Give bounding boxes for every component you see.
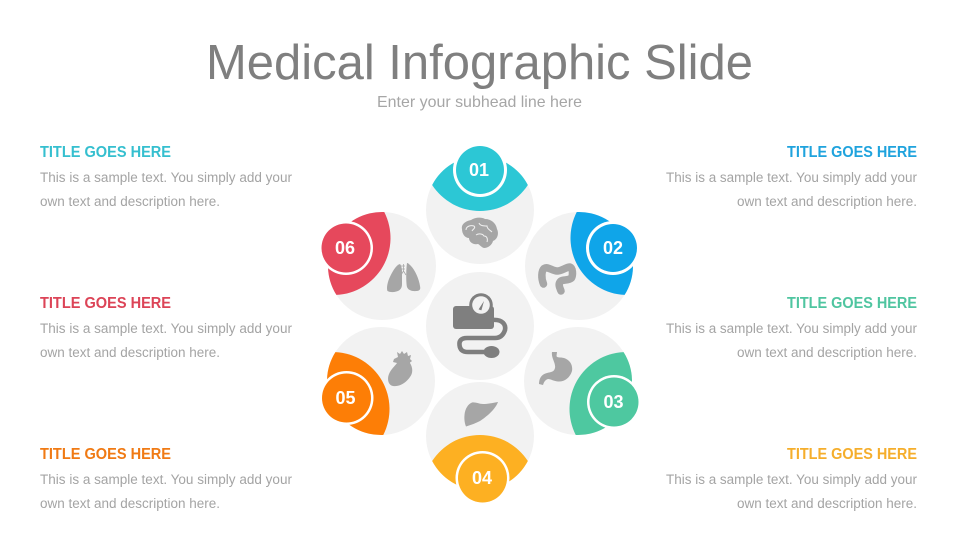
text block: left bottom: own text and description here. [40, 496, 220, 511]
text block: left middle: This is a sample text. You simply add your [40, 321, 293, 336]
badge 03: 03 [603, 392, 624, 412]
text block: left middle: TITLE GOES HERE [40, 295, 171, 312]
text block: right bottom: own text and description here. [737, 496, 917, 511]
text block: right top: This is a sample text. You simply add your [666, 170, 918, 185]
sector 01 [432, 156, 528, 211]
text block: left top: own text and description here. [40, 194, 220, 209]
panel: segment 04 liver [426, 382, 534, 505]
icon: blood pressure cuff [453, 293, 505, 358]
sector 06 [311, 198, 407, 308]
panel: segment 01 brain [426, 143, 534, 264]
text block: right middle [666, 295, 918, 360]
icon: lungs [387, 263, 420, 292]
text block: right bottom: This is a sample text. You simply add your [666, 472, 918, 487]
panel: segment 05 heart [310, 327, 435, 449]
panel: centre circle with blood pressure cuff [426, 272, 534, 380]
icon: heart [388, 351, 412, 386]
icon: stomach [539, 352, 572, 385]
sector 05 [310, 339, 406, 449]
icon: liver [464, 402, 498, 426]
title: Medical Infographic Slide [206, 36, 753, 90]
text block: left bottom: This is a sample text. You simply add your [40, 472, 293, 487]
text block: right middle: own text and description here. [737, 345, 917, 360]
panel: segment 06 lungs [311, 198, 436, 320]
text block: left middle [40, 295, 293, 360]
text block: right middle: This is a sample text. You simply add your [666, 321, 918, 336]
text block: right middle: TITLE GOES HERE [787, 295, 917, 312]
sector 04 [432, 435, 528, 490]
text block: left middle: own text and description here. [40, 345, 220, 360]
text block: left top: TITLE GOES HERE [40, 144, 171, 161]
text block: right top [666, 144, 918, 209]
panel: segment 02 intestine [525, 198, 650, 320]
text block: right bottom: TITLE GOES HERE [787, 446, 917, 463]
icon: brain [462, 218, 498, 248]
sector 02 [554, 198, 650, 308]
badge 05: 05 [335, 388, 356, 408]
text block: right top: own text and description here. [737, 194, 917, 209]
sector 03 [553, 339, 649, 449]
badge 04: 04 [472, 468, 492, 488]
badge 01: 01 [469, 160, 489, 180]
text block: left bottom [40, 446, 293, 511]
subtitle: Enter your subhead line here [377, 94, 582, 111]
badge 06: 06 [335, 238, 355, 258]
text block: left top: This is a sample text. You simply add your [40, 170, 293, 185]
icon: intestine [542, 267, 572, 291]
badge 02: 02 [603, 238, 623, 258]
panel: segment 03 stomach [524, 327, 649, 449]
text block: right bottom [666, 446, 918, 511]
text block: left top [40, 144, 293, 209]
text block: left bottom: TITLE GOES HERE [40, 446, 171, 463]
text block: right top: TITLE GOES HERE [787, 144, 917, 161]
